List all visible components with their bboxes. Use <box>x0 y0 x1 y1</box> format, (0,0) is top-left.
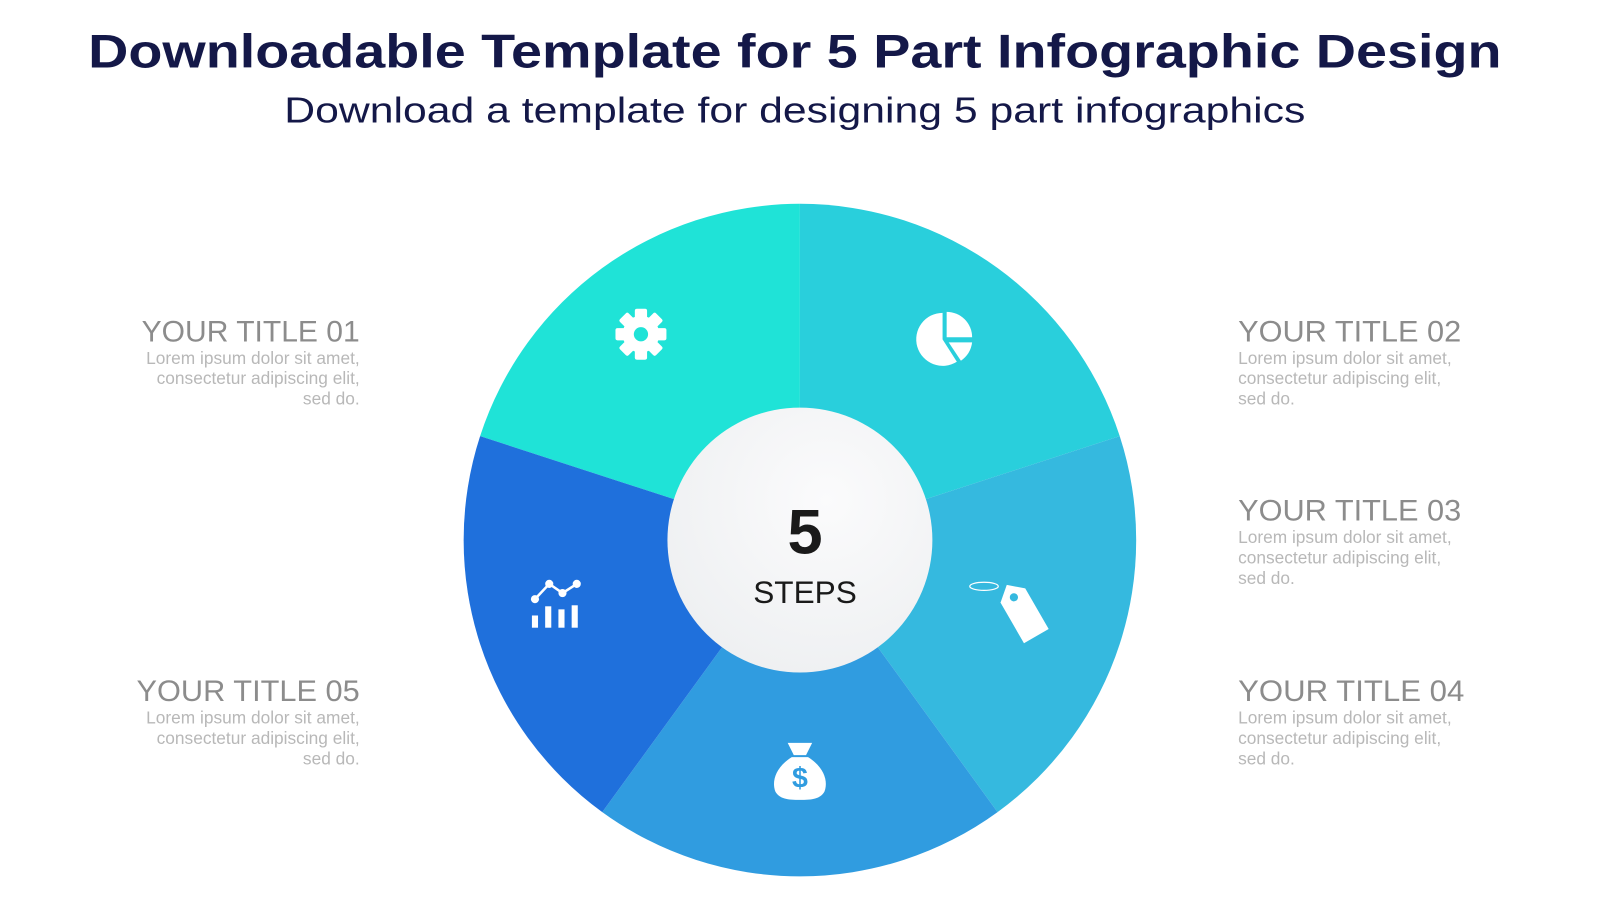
text block 05: sed do. <box>303 748 360 768</box>
text block 04 <box>1238 675 1464 768</box>
segment 4 <box>602 540 998 876</box>
title: Downloadable Template for 5 Part Infographic Design <box>88 25 1501 77</box>
segment 5 <box>464 436 800 812</box>
icon: money bag: $ <box>792 763 808 795</box>
text block 02: YOUR TITLE 02 <box>1238 315 1461 348</box>
center circle: 5 <box>787 497 823 567</box>
text block 03: Lorem ipsum dolor sit amet, <box>1238 527 1452 547</box>
text block 03: sed do. <box>1238 568 1295 588</box>
text block 02: consectetur adipiscing elit, <box>1238 368 1441 388</box>
icon: pie chart <box>916 312 972 366</box>
text block 03: YOUR TITLE 03 <box>1238 495 1461 528</box>
icon: price tag <box>966 560 1049 653</box>
text block 01 <box>142 315 360 409</box>
segment 3 <box>800 436 1136 812</box>
text block 01: YOUR TITLE 01 <box>142 315 360 348</box>
text block 01: consectetur adipiscing elit, <box>157 368 360 388</box>
text block 04: consectetur adipiscing elit, <box>1238 728 1441 748</box>
text block 05: consectetur adipiscing elit, <box>157 728 360 748</box>
segment 2 <box>800 204 1120 540</box>
segment 1 <box>480 204 800 540</box>
icon: chart <box>531 580 581 628</box>
text block 05 <box>137 675 360 768</box>
icon: money bag <box>774 743 826 800</box>
text block 02: Lorem ipsum dolor sit amet, <box>1238 348 1452 368</box>
text block 04: YOUR TITLE 04 <box>1238 675 1464 708</box>
pie chart <box>464 204 1136 876</box>
center circle: STEPS <box>753 574 857 610</box>
text block 04: sed do. <box>1238 748 1295 768</box>
icon: gear <box>615 309 666 360</box>
text block 03: consectetur adipiscing elit, <box>1238 548 1441 568</box>
text block 02: sed do. <box>1238 389 1295 409</box>
text block 04: Lorem ipsum dolor sit amet, <box>1238 707 1452 727</box>
subtitle: Download a template for designing 5 part infographics <box>284 90 1305 130</box>
text block 05: Lorem ipsum dolor sit amet, <box>146 707 360 727</box>
text block 03 <box>1238 495 1461 588</box>
text block 02 <box>1238 315 1461 409</box>
center circle <box>667 408 932 673</box>
text block 05: YOUR TITLE 05 <box>137 675 360 708</box>
text block 01: Lorem ipsum dolor sit amet, <box>146 348 360 368</box>
text block 01: sed do. <box>303 389 360 409</box>
